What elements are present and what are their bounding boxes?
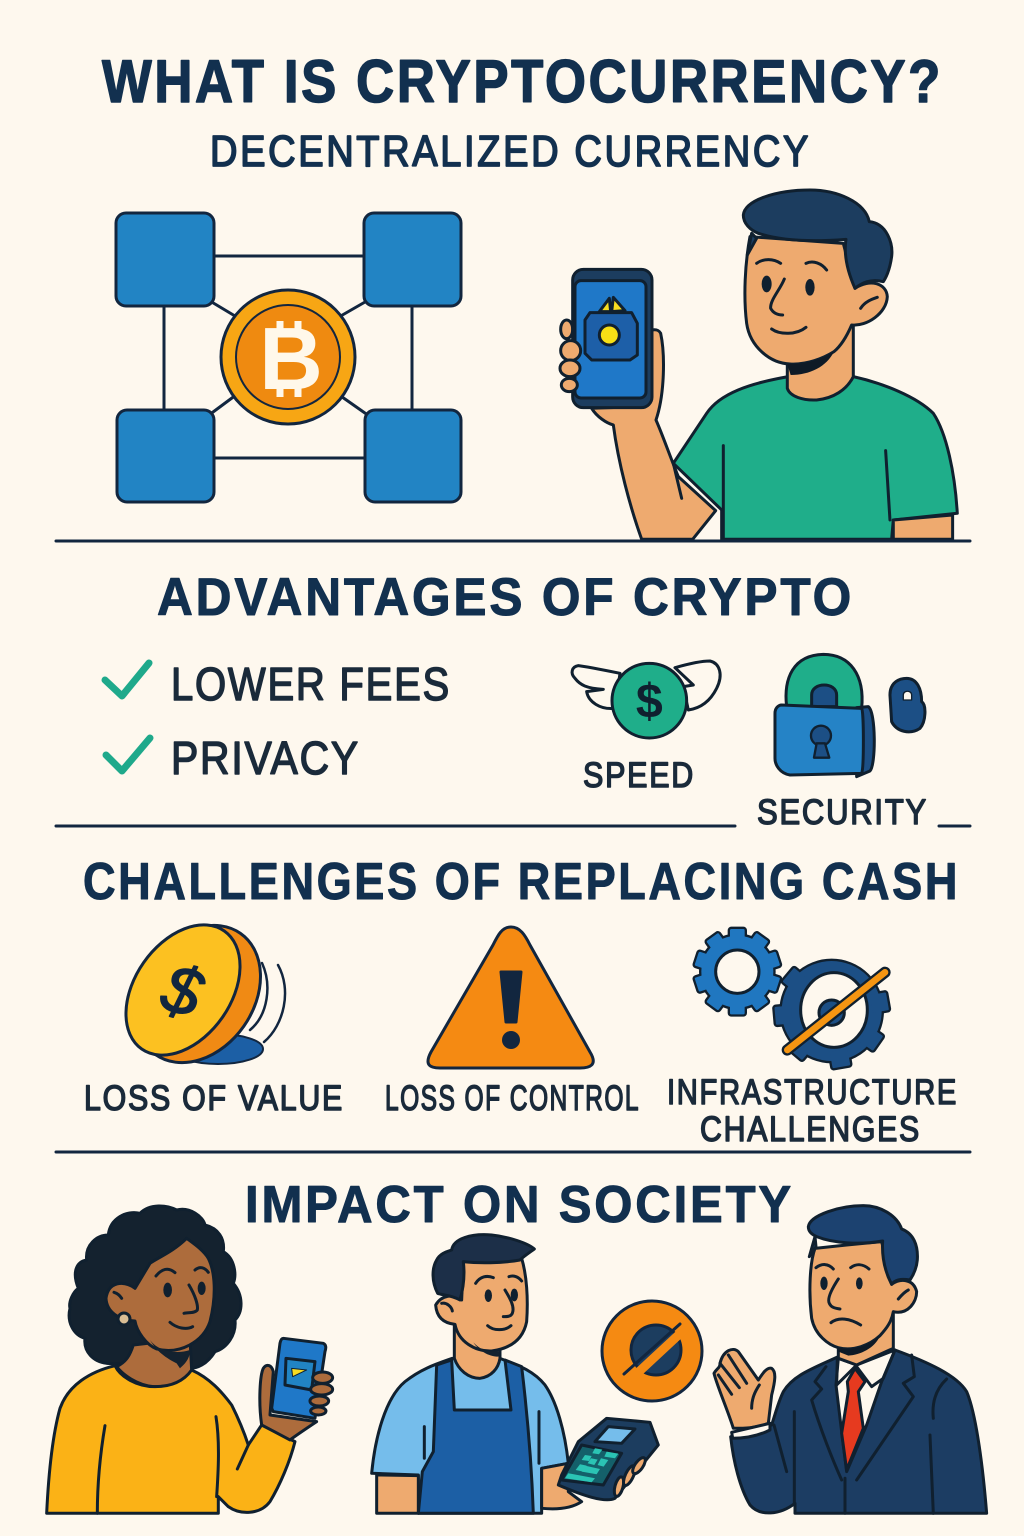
label: infrastructure challenges <box>667 1073 958 1149</box>
person: woman with phone <box>47 1206 333 1513</box>
arms <box>377 1463 582 1513</box>
icon: speed winged coin: $ <box>636 675 663 729</box>
chin shadow <box>838 1336 880 1356</box>
person holding phone <box>560 190 957 539</box>
icon: speed winged coin <box>572 661 720 738</box>
sweater folds <box>97 1417 248 1513</box>
shirt <box>372 1358 568 1513</box>
label: loss of control: LOSS OF CONTROL <box>385 1079 640 1118</box>
lapels and jacket lines <box>774 1350 947 1513</box>
subtitle: DECENTRALIZED CURRENCY <box>210 127 811 176</box>
face features <box>424 1276 539 1463</box>
person: shopkeeper with terminal <box>372 1235 658 1513</box>
chin shadow <box>150 1340 190 1368</box>
icon: falling coin <box>102 901 286 1087</box>
bare upper arm <box>893 515 953 539</box>
fingers <box>613 1456 648 1497</box>
hair <box>69 1206 241 1368</box>
cuff <box>732 1423 770 1438</box>
list: advantages: LOWER FEES <box>171 658 451 710</box>
shirt folds <box>723 446 890 539</box>
hand <box>260 1365 317 1440</box>
sweater <box>47 1366 295 1513</box>
list: advantages <box>105 658 451 784</box>
icon: padlock <box>775 654 925 777</box>
arm fold <box>673 463 682 498</box>
neck <box>838 1308 893 1365</box>
arm and hand <box>592 330 716 539</box>
tie <box>842 1368 865 1470</box>
phone <box>573 269 652 408</box>
fingers lines <box>718 1355 759 1408</box>
icon: gears <box>694 929 889 1068</box>
hair <box>808 1206 917 1284</box>
icon: bitcoin coin <box>221 290 355 424</box>
hair <box>433 1235 534 1300</box>
chin shadow <box>787 352 834 375</box>
neck <box>117 1338 192 1387</box>
divider <box>56 824 970 828</box>
hair <box>743 190 892 288</box>
diagram: blockchain network <box>116 213 461 502</box>
heading: advantages: ADVANTAGES OF CRYPTO <box>157 568 854 627</box>
divider <box>56 540 970 542</box>
payment terminal <box>558 1418 658 1500</box>
head <box>810 1242 917 1349</box>
icon: no symbol <box>602 1301 702 1401</box>
chin shadow <box>473 1342 500 1357</box>
finger behind phone <box>561 320 573 339</box>
divider <box>56 1150 970 1154</box>
hand <box>714 1349 775 1428</box>
fingers <box>560 341 581 392</box>
phone <box>272 1338 326 1418</box>
head <box>745 237 887 364</box>
icon: check <box>106 738 150 771</box>
face <box>106 1238 214 1350</box>
icon: check <box>105 663 149 696</box>
jacket <box>731 1350 987 1513</box>
icon: warning triangle <box>428 927 593 1068</box>
face features <box>809 1237 908 1325</box>
list: advantages: PRIVACY <box>171 732 360 784</box>
label: security: SECURITY <box>757 793 928 832</box>
icon: bitcoin coin: B <box>259 309 323 408</box>
shirt <box>673 377 957 539</box>
earring <box>118 1313 130 1325</box>
heading: impact: IMPACT ON SOCIETY <box>245 1176 794 1234</box>
neck <box>454 1308 500 1378</box>
fingers <box>310 1372 333 1415</box>
shirt <box>836 1350 895 1472</box>
face features <box>114 1268 208 1328</box>
label: loss of value: LOSS OF VALUE <box>84 1079 344 1118</box>
neck <box>787 323 853 400</box>
icon: small lock <box>890 678 925 732</box>
face features <box>747 233 877 333</box>
head <box>436 1258 527 1351</box>
icon: falling coin: $ <box>153 949 211 1033</box>
label: speed: SPEED <box>583 756 695 795</box>
label: infrastructure challenges: INFRASTRUCTURE <box>667 1073 958 1112</box>
label: infrastructure challenges: CHALLENGES <box>700 1110 921 1149</box>
apron <box>418 1360 533 1513</box>
person: businessman <box>714 1206 987 1513</box>
